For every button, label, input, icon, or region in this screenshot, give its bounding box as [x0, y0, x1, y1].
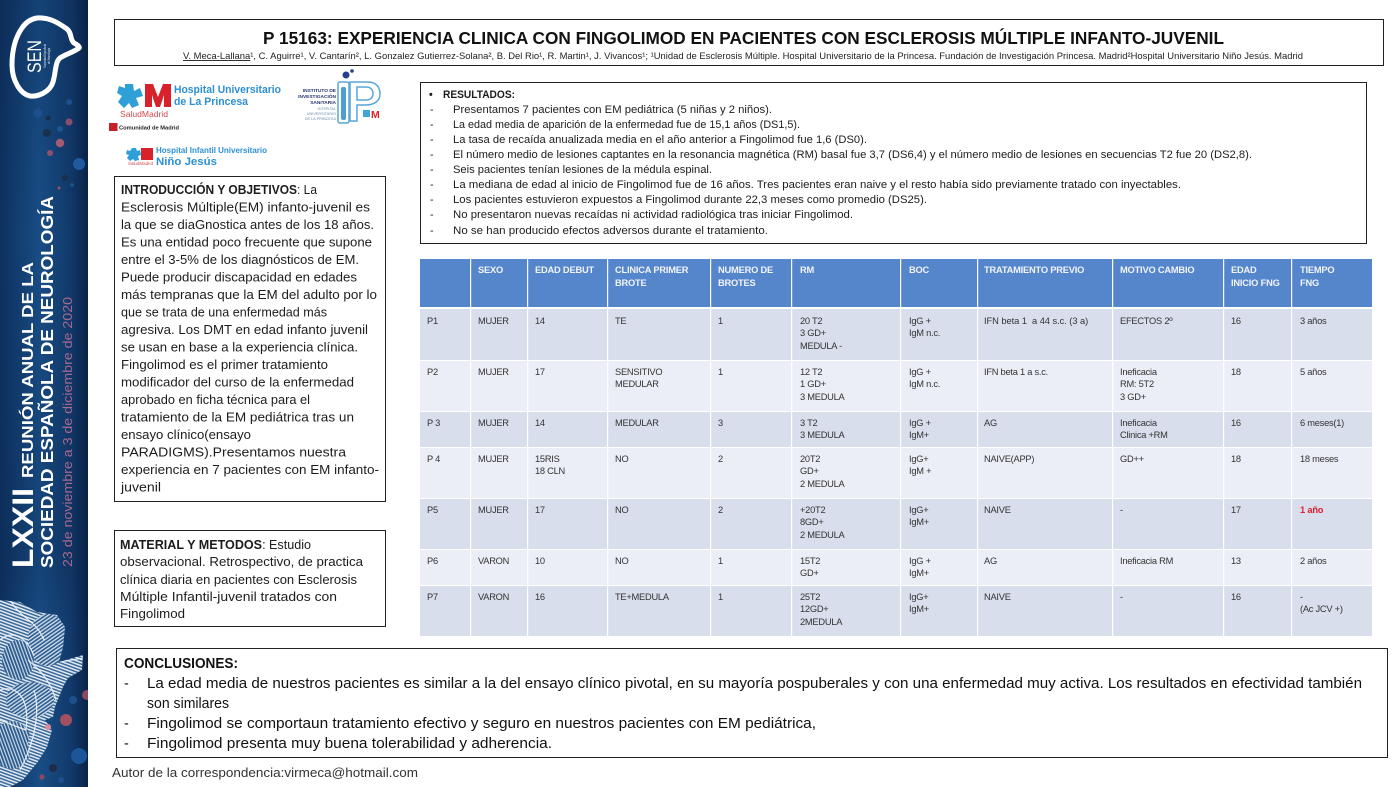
table row P6: NO	[615, 556, 628, 566]
panel: conclusiones: Fingolimod presenta muy buena tolerabilidad y adherencia.	[147, 736, 552, 752]
table header row: RM	[800, 265, 815, 275]
table row P1: 3 años	[1300, 316, 1327, 326]
table row P5: IgG+	[909, 505, 928, 515]
panel: resultados: -	[430, 119, 434, 131]
panel: introducción y objetivos: ensayo clínico(ensayo	[121, 427, 251, 442]
panel: conclusiones	[116, 648, 1388, 758]
brain illustration	[0, 598, 88, 787]
table row P2: RM: 5T2	[1120, 379, 1154, 389]
table row P2: MEDULAR	[615, 379, 659, 389]
table row P4: 2	[718, 454, 723, 464]
table row P3: MEDULAR	[615, 418, 659, 428]
table row P7: -	[1120, 592, 1123, 602]
table row P7: 25T2	[800, 592, 820, 602]
congress name: SOCIEDAD ESPAÑOLA DE NEUROLOGÍA	[36, 196, 57, 568]
table row P1: IFN beta 1 a 44 s.c. (3 a)	[984, 316, 1088, 326]
icon: SEN brain logo	[12, 18, 79, 96]
table row P5	[420, 499, 1372, 549]
table row P7: (Ac JCV +)	[1300, 604, 1343, 614]
table row P5: MUJER	[478, 505, 509, 515]
panel: introducción y objetivos: Puede producir discapacidad en edades	[121, 270, 357, 284]
table row P3: 3 T2	[800, 418, 818, 428]
logo: Instituto de Investigación Sanitaria: INVESTIGACIÓN	[298, 92, 337, 100]
table row P5: P5	[427, 505, 438, 515]
table row P1: IgM n.c.	[909, 328, 940, 338]
table row P1: 14	[535, 316, 545, 326]
table row P6	[420, 550, 1372, 585]
table header row: TIEMPO	[1300, 265, 1334, 275]
panel: conclusiones: -	[124, 736, 129, 752]
table row P2: P2	[427, 367, 438, 377]
table row P5: 8GD+	[800, 517, 824, 527]
table row P4: 18 meses	[1300, 454, 1339, 464]
table row P4: MUJER	[478, 454, 509, 464]
table row P6: 13	[1231, 556, 1241, 566]
table row P3: 3 MEDULA	[800, 430, 846, 440]
panel: introducción y objetivos: agresiva. Los DMT en edad infanto juvenil	[121, 322, 368, 337]
table row P1: MEDULA -	[800, 341, 842, 351]
table row P7: P7	[427, 592, 438, 602]
table row P1: EFECTOS 2º	[1120, 316, 1173, 326]
panel: introducción y objetivos	[114, 176, 386, 502]
table row P6: VARON	[478, 556, 509, 566]
table row P6: IgM+	[909, 568, 929, 578]
table header row	[420, 259, 1372, 307]
table row P4: 2 MEDULA	[800, 479, 846, 489]
table header row: TRATAMIENTO PREVIO	[984, 265, 1084, 275]
panel: material y métodos: Fingolimod	[120, 606, 185, 621]
logo: Hospital Infantil Niño Jesús	[126, 146, 267, 168]
panel: conclusiones: son similares	[147, 696, 229, 712]
table row P2: SENSITIVO	[615, 367, 662, 377]
table header row: BROTE	[615, 278, 647, 288]
table header row: BROTES	[718, 278, 756, 288]
table row P5: -	[1120, 505, 1123, 515]
table row P3: IgM+	[909, 430, 929, 440]
panel: introducción y objetivos: juvenil	[120, 480, 161, 494]
authors: V. Meca-Lallana¹, C. Aguirre¹, V. Cantarín², L. Gonzalez Gutierrez-Solana², B. Del Rio¹, R. Martin¹, J. Vivancos¹; ¹Unidad de Esclerosis Múltiple. Hospital Universitario de la Princesa. Fundación de Investigación Princesa. Madrid²Hospital Universitario Niño Jesús. Madrid	[183, 51, 1303, 61]
table row P4: IgM +	[909, 466, 931, 476]
panel: material y métodos: MATERIAL Y METODOS: Estudio	[120, 537, 311, 552]
panel: introducción y objetivos: modificador del curso de la enfermedad	[121, 374, 354, 390]
panel: conclusiones: -	[124, 676, 129, 692]
table row P2: MUJER	[478, 367, 509, 377]
table row P7: IgM+	[909, 604, 929, 614]
table header row: BOC	[909, 265, 930, 275]
table row P2: 5 años	[1300, 367, 1327, 377]
table row P1: P1	[427, 316, 438, 326]
panel: material y métodos: clínica diaria en pacientes con Esclerosis	[120, 572, 357, 587]
table row P6: Ineficacia RM	[1120, 556, 1173, 566]
table row P1	[420, 309, 1372, 360]
table row P5: 2	[718, 505, 723, 515]
table row P6: AG	[984, 556, 997, 566]
table: pacientes	[420, 259, 1372, 636]
table row P1: MUJER	[478, 316, 509, 326]
panel: introducción y objetivos: la que se diaGnostica antes de los 18 años.	[121, 217, 374, 232]
logo: Hospital Universitario de La Princesa: de La Princesa	[174, 96, 249, 108]
table row P1: IgG +	[909, 316, 931, 326]
title: P 15163: EXPERIENCIA CLINICA CON FINGOLIMOD EN PACIENTES CON ESCLEROSIS MÚLTIPLE INFANTO-JUVENIL	[263, 27, 1224, 48]
table header row: EDAD	[1231, 265, 1257, 275]
panel: introducción y objetivos: experiencia en 7 pacientes con EM infanto-	[121, 462, 379, 477]
panel: introducción y objetivos: se usan en base a la experiencia clínica.	[121, 340, 358, 354]
panel: introducción y objetivos: INTRODUCCIÓN Y OBJETIVOS: La	[121, 182, 318, 197]
table row P7: VARON	[478, 592, 509, 602]
table row P3: P 3	[427, 418, 440, 428]
logo: Instituto de Investigación Sanitaria: INSTITUTO DE	[303, 88, 337, 94]
panel: conclusiones: -	[124, 716, 129, 732]
panel: resultados: La tasa de recaída anualizada media en el año anterior a Fingolimod fue 1,6 (DS0).	[453, 134, 867, 146]
table row P2: 1	[718, 367, 723, 377]
table row P2: 18	[1231, 367, 1241, 377]
table row P7	[420, 586, 1372, 636]
table header row: FNG	[1300, 278, 1319, 288]
table row P7: TE+MEDULA	[615, 592, 670, 602]
panel: resultados: La mediana de edad al inicio de Fingolimod fue de 16 años. Tres pacientes eran naive y el resto había sido previamente tratado con inyectables.	[453, 179, 1181, 191]
table row P6: 1	[718, 556, 723, 566]
table row P4: 15RIS	[535, 454, 560, 464]
table row P7: NAIVE	[984, 592, 1011, 602]
table row P1: 3 GD+	[800, 328, 826, 338]
table row P4	[420, 448, 1372, 498]
table row P3: Ineficacia	[1120, 418, 1158, 428]
panel: resultados: -	[430, 194, 434, 206]
table row P4: 18 CLN	[535, 466, 565, 476]
table row P1: 1	[718, 316, 723, 326]
panel: material y métodos	[114, 530, 386, 626]
icon: SEN brain logo: SEN	[25, 40, 46, 73]
table row P4: 20T2	[800, 454, 820, 464]
table row P3: IgG +	[909, 418, 931, 428]
panel: resultados: Seis pacientes tenían lesiones de la médula espinal.	[453, 164, 712, 176]
logo: Instituto de Investigación Sanitaria: HOSPITAL	[318, 107, 336, 111]
table row P5: IgM+	[909, 517, 929, 527]
panel: resultados: •	[429, 89, 433, 101]
table header row: CLINICA PRIMER	[615, 265, 689, 275]
panel: introducción y objetivos: que se trata de una enfermedad más	[121, 304, 327, 320]
table row P2: 17	[535, 367, 545, 377]
title box	[114, 20, 1384, 66]
icon: SEN brain logo: Sociedad Española	[43, 44, 47, 68]
congress name: REUNIÓN ANUAL DE LA	[19, 262, 37, 478]
table row P3: MUJER	[478, 418, 509, 428]
panel: resultados: -	[430, 225, 434, 237]
table row P1: TE	[615, 316, 626, 326]
table row P5: NAIVE	[984, 505, 1011, 515]
table row P6: 15T2	[800, 556, 820, 566]
table row P3: Clinica +RM	[1120, 430, 1168, 440]
table row P1: 16	[1231, 316, 1241, 326]
congress name: 23 de noviembre a 3 de diciembre de 2020	[61, 297, 75, 567]
table row P3: 3	[718, 418, 723, 428]
table row P7: -	[1300, 592, 1303, 602]
congress name	[12, 196, 72, 568]
panel: introducción y objetivos: más tempranas que la EM del adulto por lo	[121, 287, 377, 302]
panel: resultados: Los pacientes estuvieron expuestos a Fingolimod durante 22,3 meses como promedio (DS25).	[453, 194, 927, 206]
panel: resultados: -	[430, 134, 434, 146]
table header row: MOTIVO CAMBIO	[1120, 265, 1194, 275]
logo: Instituto de Investigación Sanitaria: UNIVERSITARIO	[307, 112, 336, 116]
panel: introducción y objetivos: PARADIGMS).Presentamos nuestra	[121, 444, 347, 460]
panel: introducción y objetivos: aprobado en ficha técnica para el	[121, 392, 310, 407]
table header row: NUMERO DE	[718, 265, 773, 275]
logo: Instituto de Investigación Sanitaria	[298, 69, 380, 123]
panel: resultados: Presentamos 7 pacientes con EM pediátrica (5 niñas y 2 niños).	[453, 104, 772, 116]
table row P4: IgG+	[909, 454, 928, 464]
table row P5: +20T2	[800, 505, 825, 515]
panel: conclusiones: CONCLUSIONES:	[124, 656, 238, 672]
footer: correspondence: Autor de la correspondencia:virmeca@hotmail.com	[112, 766, 418, 780]
panel: resultados: -	[430, 104, 434, 116]
table row P2: 3 MEDULA	[800, 392, 846, 402]
table row P4: NAIVE(APP)	[984, 454, 1034, 464]
molecule dots bottom	[39, 690, 92, 783]
table row P6: P6	[427, 556, 438, 566]
table row P5: 17	[535, 505, 545, 515]
table row P6: 2 años	[1300, 556, 1327, 566]
table row P7: 12GD+	[800, 604, 828, 614]
logo: Hospital Universitario de La Princesa	[109, 84, 281, 132]
logo: Hospital Infantil Niño Jesús: Niño Jesús	[156, 156, 217, 168]
table row P3	[420, 412, 1372, 447]
table row P5: NO	[615, 505, 628, 515]
panel: resultados: RESULTADOS:	[443, 89, 515, 101]
logo: Hospital Universitario de La Princesa: Hospital Universitario	[174, 84, 281, 96]
molecule dots top	[34, 99, 85, 190]
logo: Hospital Infantil Niño Jesús: SaludMadrid	[128, 161, 153, 166]
logo: Instituto de Investigación Sanitaria: M	[371, 109, 380, 121]
table row P2: 12 T2	[800, 367, 822, 377]
table row P6: GD+	[800, 568, 819, 578]
panel: conclusiones: La edad media de nuestros pacientes es similar a la del ensayo clínico pivotal, en su mayoría pospuberales y con una enfermedad muy activa. Los resultados en efectividad también	[147, 676, 1362, 692]
table row P4: P 4	[427, 454, 440, 464]
table row P1: 20 T2	[800, 316, 822, 326]
table row P2	[420, 361, 1372, 411]
panel: resultados: La edad media de aparición de la enfermedad fue de 15,1 años (DS1,5).	[453, 119, 800, 131]
table row P7: 1	[718, 592, 723, 602]
icon: SEN brain logo: de Neurología	[47, 48, 51, 64]
logo: Instituto de Investigación Sanitaria: SANITARIA	[310, 100, 337, 106]
table row P5: 1 año	[1300, 505, 1324, 515]
panel: introducción y objetivos: entre el 3-5% de los diagnósticos de EM.	[121, 252, 359, 267]
panel: introducción y objetivos: Es una entidad poco frecuente que supone	[121, 234, 372, 250]
table row P6: IgG +	[909, 556, 931, 566]
panel: introducción y objetivos: tratamiento de la EM pediátrica tras un	[121, 410, 354, 424]
table row P4: GD++	[1120, 454, 1144, 464]
logo: Hospital Universitario de La Princesa: SaludMadrid	[120, 109, 168, 119]
table row P3: 14	[535, 418, 545, 428]
table row P4: GD+	[800, 466, 819, 476]
table row P2: IFN beta 1 a s.c.	[984, 367, 1048, 377]
table row P2: IgM n.c.	[909, 379, 940, 389]
panel: material y métodos: observacional. Retrospectivo, de practica	[120, 554, 364, 569]
panel: resultados: -	[430, 164, 434, 176]
table header row: SEXO	[478, 265, 503, 275]
table row P7: 16	[1231, 592, 1241, 602]
sidebar banner	[0, 0, 92, 787]
panel: material y métodos: Múltiple Infantil-juvenil tratados con	[120, 589, 337, 604]
table row P2: Ineficacia	[1120, 367, 1158, 377]
table row P7: 2MEDULA	[800, 617, 843, 627]
table row P3: 16	[1231, 418, 1241, 428]
table row P3: 6 meses(1)	[1300, 418, 1344, 428]
panel: resultados: El número medio de lesiones captantes en la resonancia magnética (RM) basal fue 3,7 (DS6,4) y el número medio de lesiones en secuencias T2 fue 20 (DS2,8).	[453, 149, 1252, 161]
table row P2: IgG +	[909, 367, 931, 377]
table row P4: 18	[1231, 454, 1241, 464]
table header row: INICIO FNG	[1231, 278, 1280, 288]
panel: conclusiones: Fingolimod se comportaun tratamiento efectivo y seguro en nuestros pacientes con EM pediátrica,	[147, 716, 816, 732]
table row P3: AG	[984, 418, 997, 428]
congress name: LXXII	[7, 488, 40, 568]
panel: resultados: -	[430, 149, 434, 161]
panel: resultados: No presentaron nuevas recaídas ni actividad radiológica tras iniciar Fingolimod.	[453, 209, 853, 221]
table row P5: 2 MEDULA	[800, 530, 846, 540]
panel: resultados: -	[430, 209, 434, 221]
panel: resultados	[420, 82, 1366, 244]
logo: Hospital Universitario de La Princesa: Comunidad de Madrid	[119, 126, 179, 132]
panel: introducción y objetivos: Esclerosis Múltiple(EM) infanto-juvenil es	[121, 200, 371, 214]
panel: resultados: No se han producido efectos adversos durante el tratamiento.	[453, 225, 768, 237]
logo: Instituto de Investigación Sanitaria: DE LA PRINCESA	[305, 117, 336, 121]
table row P2: 3 GD+	[1120, 392, 1146, 402]
table row P6: 10	[535, 556, 545, 566]
table row P4: NO	[615, 454, 628, 464]
table row P5: 17	[1231, 505, 1241, 515]
table row P7: 16	[535, 592, 545, 602]
table header row: EDAD DEBUT	[535, 265, 594, 275]
table row P7: IgG+	[909, 592, 928, 602]
logo: Hospital Infantil Niño Jesús: Hospital Infantil Universitario	[156, 146, 267, 155]
panel: introducción y objetivos: Fingolimod es el primer tratamiento	[121, 357, 328, 372]
panel: resultados: -	[430, 179, 434, 191]
table row P2: 1 GD+	[800, 379, 826, 389]
